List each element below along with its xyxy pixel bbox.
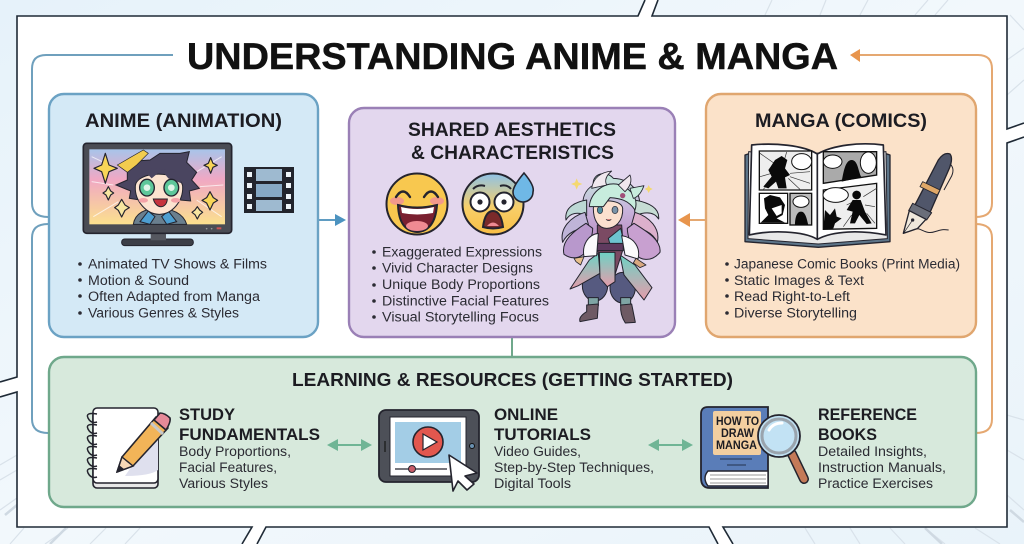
connector: blue title to anime [32, 55, 173, 217]
text: reference books: Instruction Manuals, [818, 460, 946, 475]
list: anime points: Motion & Sound [88, 273, 189, 288]
text: reference books: REFERENCE [818, 406, 917, 424]
text: reference books: Detailed Insights, [818, 444, 927, 459]
list: manga points: Japanese Comic Books (Print Media) [734, 256, 960, 272]
heading: shared aesthetics: SHARED AESTHETICS [408, 120, 616, 141]
connector: blue anime to learning [32, 224, 48, 433]
text: online tutorials: Video Guides, [494, 444, 581, 459]
icon: reference book and magnifier: HOW TO [716, 416, 759, 428]
text: study fundamentals: FUNDAMENTALS [179, 426, 320, 444]
arrow: anime to shared [318, 214, 346, 226]
connector: orange manga to learning [976, 224, 992, 433]
list: shared points [372, 244, 549, 324]
icon: tablet with video [379, 410, 479, 491]
text: online tutorials [494, 406, 654, 491]
text: study fundamentals: Facial Features, [179, 460, 277, 475]
icon: notebook and pencil [87, 408, 170, 488]
list: manga points: Diverse Storytelling [734, 306, 857, 320]
list: shared points: Unique Body Proportions [382, 277, 540, 292]
list: anime points: Animated TV Shows & Films [88, 256, 267, 272]
text: reference books [818, 406, 946, 491]
panel: shared aesthetics [349, 108, 675, 337]
panel: learning and resources [49, 357, 976, 507]
icon: reference book and magnifier: DRAW [721, 428, 754, 440]
connector: shared to learning [511, 337, 513, 357]
text: study fundamentals [179, 406, 320, 491]
text: online tutorials: ONLINE [494, 406, 558, 424]
icon: laughing face [386, 174, 448, 234]
icon: reference book and magnifier: MANGA [716, 440, 757, 452]
icon: tv with anime character [83, 143, 232, 246]
heading: learning and resources: LEARNING & RESOURCES (GETTING STARTED) [292, 369, 733, 390]
list: manga points [725, 256, 960, 320]
heading: shared aesthetics: & CHARACTERISTICS [411, 143, 614, 164]
icon: fountain pen [903, 153, 953, 233]
text: study fundamentals: Various Styles [179, 476, 268, 491]
text: online tutorials: Step-by-Step Techniques, [494, 460, 654, 475]
text: reference books: Practice Exercises [818, 476, 933, 491]
text: online tutorials: TUTORIALS [494, 426, 591, 444]
icon: reference book and magnifier [701, 407, 804, 488]
arrow: study to tutorials [327, 439, 372, 451]
list: shared points: Exaggerated Expressions [382, 244, 542, 260]
list: manga points: Static Images & Text [734, 273, 864, 288]
title: UNDERSTANDING ANIME & MANGA [187, 36, 838, 77]
text: study fundamentals: STUDY [179, 406, 235, 424]
list: anime points: Often Adapted from Manga [88, 289, 261, 304]
heading: shared aesthetics [408, 120, 616, 164]
text: study fundamentals: Body Proportions, [179, 444, 291, 459]
icon: shocked face with sweat drop [462, 173, 533, 234]
text: reference books: BOOKS [818, 426, 877, 444]
icon: film strip [244, 167, 294, 213]
list: shared points: Distinctive Facial Features [382, 294, 549, 308]
text: online tutorials: Digital Tools [494, 476, 571, 491]
panel: manga [706, 94, 976, 337]
heading: manga: MANGA (COMICS) [755, 111, 927, 132]
list: shared points: Visual Storytelling Focus [382, 310, 539, 324]
panel: anime [49, 94, 318, 337]
list: anime points [78, 256, 267, 320]
illustration: anime character [562, 171, 660, 323]
list: shared points: Vivid Character Designs [382, 260, 533, 276]
arrow: manga to shared [678, 213, 706, 227]
list: manga points: Read Right-to-Left [734, 289, 850, 304]
heading: anime: ANIME (ANIMATION) [85, 111, 282, 132]
icon: open manga book [745, 144, 890, 247]
list: anime points: Various Genres & Styles [88, 306, 239, 320]
connector: orange manga to title [850, 49, 992, 217]
arrow: tutorials to books [648, 439, 693, 451]
